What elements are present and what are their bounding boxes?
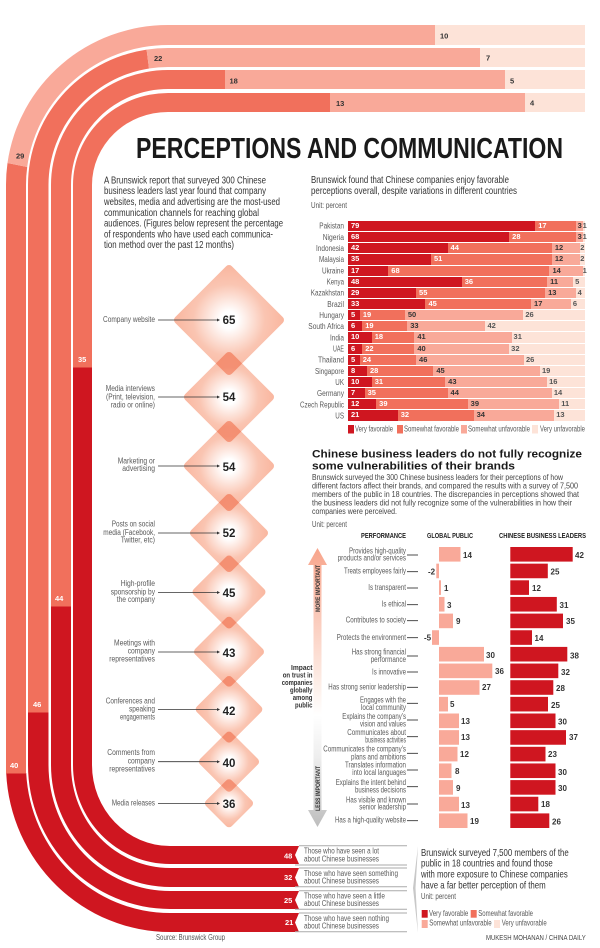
stacked bar chart: perceptions by country: 16 xyxy=(549,377,557,386)
legend: country chart: Somewhat favorable xyxy=(404,425,459,434)
stacked bar chart: perceptions by country: 31 xyxy=(514,332,522,341)
stacked bar chart: perceptions by country: 6 xyxy=(351,321,355,330)
row: seen a little: Those who have seen a little xyxy=(304,891,385,900)
heading: favorable perceptions: Unit: percent xyxy=(311,201,348,210)
stacked bar chart: perceptions by country: 46 xyxy=(419,355,427,364)
intro paragraph: channels: websites, media and advertising are the most-used xyxy=(103,196,280,208)
performance row labels xyxy=(323,546,407,825)
performance row labels: senior leadership xyxy=(359,803,406,812)
stacked bar chart: perceptions by country: 2 xyxy=(580,243,584,252)
stacked bar chart: perceptions by country: 1 xyxy=(583,232,587,241)
performance row labels: vision and values xyxy=(360,719,406,728)
performance row labels: into local languages xyxy=(352,768,406,777)
bar chart: Chinese business leaders: 30 xyxy=(558,768,567,777)
bar chart: Chinese business leaders: 30 xyxy=(558,718,567,726)
stacked bar chart: perceptions by country: 79 xyxy=(351,221,359,230)
performance row labels: Engages with the xyxy=(360,695,406,704)
column headers: PERFORMANCE xyxy=(361,531,406,540)
callout: exposure to Chinese companies xyxy=(420,847,569,901)
diamonds: communication channels xyxy=(172,263,286,829)
row: seen a little xyxy=(295,891,407,909)
channel: media interviews: radio or online) xyxy=(111,401,155,410)
legend: exposure: Somewhat unfavorable xyxy=(429,918,492,928)
channel: media interviews: 54 xyxy=(223,392,236,404)
performance row labels: Communicates about xyxy=(347,728,407,737)
stacked bar chart: perceptions by country: 12 xyxy=(555,243,563,252)
track: have seen a lot: 35 xyxy=(78,355,86,364)
row: seen a little: about Chinese businesses xyxy=(304,899,379,908)
bar chart: Chinese business leaders: 12 xyxy=(532,584,541,593)
channel: comments: representatives xyxy=(109,765,155,774)
stacked bar chart: perceptions by country: 41 xyxy=(417,332,426,341)
stacked bar chart: perceptions by country: 33 xyxy=(410,321,419,330)
arrow: importance scale xyxy=(308,548,327,827)
credit: MUKESH MOHANAN / CHINA DAILY xyxy=(486,935,586,942)
track: have seen a lot: 4 xyxy=(530,98,535,108)
heading: favorable perceptions xyxy=(311,174,517,210)
row: seen something: Those who have seen something xyxy=(304,869,398,878)
scale caption: impact on trust: companies xyxy=(282,678,312,687)
channel: media interviews xyxy=(106,384,236,410)
channel: conferences: Conferences and xyxy=(106,697,155,706)
performance row labels: Has strong senior leadership xyxy=(328,682,406,691)
stacked bar chart: perceptions by country: 24 xyxy=(363,355,371,364)
stacked bar chart: perceptions by country: 45 xyxy=(428,299,437,308)
channel: meetings: 43 xyxy=(223,648,235,660)
stacked bar chart: perceptions by country: 17 xyxy=(534,299,542,308)
row: seen nothing: about Chinese businesses xyxy=(304,921,379,930)
country labels: Singapore xyxy=(315,367,344,376)
column headers xyxy=(361,531,586,540)
country labels: Malaysia xyxy=(319,255,344,264)
legend: country chart: Very unfavorable xyxy=(540,425,585,434)
performance row labels: performance xyxy=(371,655,406,664)
bar chart: global public xyxy=(424,547,504,828)
row: seen nothing: Those who have seen nothing xyxy=(304,914,389,923)
stacked bar chart: perceptions by country: 19 xyxy=(365,321,374,330)
performance row labels: Is ethical xyxy=(382,600,406,609)
stacked bar chart: perceptions by country: 3 xyxy=(578,232,582,241)
performance row labels: Has visible and known xyxy=(346,795,406,804)
stacked bar chart: perceptions by country: 28 xyxy=(512,232,520,241)
heading: favorable perceptions: perceptions overall, despite variations in different countries xyxy=(311,185,517,197)
country labels: Czech Republic xyxy=(300,400,344,409)
performance row labels: Contributes to society xyxy=(346,615,406,624)
country labels: South Africa xyxy=(308,322,344,331)
channel: social media: 52 xyxy=(223,528,235,540)
stacked bar chart: perceptions by country: 42 xyxy=(351,243,359,252)
track: have seen something xyxy=(51,70,585,887)
stacked bar chart: perceptions by country: 43 xyxy=(448,377,457,386)
channel: comments: Comments from xyxy=(107,748,155,757)
channel: meetings: company xyxy=(128,646,155,655)
stacked bar chart: perceptions by country: 7 xyxy=(351,388,355,397)
bar chart: global public: 27 xyxy=(482,683,491,692)
track: have seen a little: 25 xyxy=(284,896,292,905)
scale caption: impact on trust: Impact xyxy=(291,663,313,672)
heading: favorable perceptions: Brunswick found that Chinese companies enjoy favorable xyxy=(311,174,509,186)
bar chart: global public: 3 xyxy=(447,601,452,610)
performance row labels: Explains the intent behind xyxy=(336,778,406,787)
stacked bar chart: perceptions by country: 21 xyxy=(351,410,359,419)
track: have seen something: 5 xyxy=(510,76,514,86)
stacked bar chart: perceptions by country: 44 xyxy=(451,243,459,252)
country labels xyxy=(300,222,345,420)
scale caption: impact on trust: globally xyxy=(290,685,313,694)
performance row labels: products and/or services xyxy=(338,554,406,563)
channel: marketing or advertising: 54 xyxy=(223,462,236,474)
row: seen a lot: Those who have seen a lot xyxy=(304,846,380,855)
stacked bar chart: perceptions by country: 32 xyxy=(511,344,520,353)
stacked bar chart: perceptions by country: 5 xyxy=(351,355,355,364)
channel: marketing or advertising xyxy=(118,456,236,474)
intro paragraph: channels: business leaders last year found that company xyxy=(104,185,267,197)
stacked bar chart: perceptions by country: 33 xyxy=(351,299,359,308)
bar chart: Chinese business leaders: 25 xyxy=(550,568,560,576)
scale caption: impact on trust xyxy=(282,663,313,709)
bar chart: Chinese business leaders: 42 xyxy=(575,551,584,560)
stacked bar chart: perceptions by country: 31 xyxy=(375,377,383,386)
channel: high-profile sponsorship: the company xyxy=(117,595,155,604)
channel: media releases xyxy=(112,798,235,811)
scale caption: impact on trust: public xyxy=(295,700,312,709)
stacked bar chart: perceptions by country: 14 xyxy=(552,266,561,275)
bar chart: Chinese business leaders: 28 xyxy=(556,684,565,693)
stacked bar chart: perceptions by country: 35 xyxy=(368,388,376,397)
stacked bar chart: perceptions by country: 5 xyxy=(351,310,355,319)
bar chart: global public: 9 xyxy=(456,617,461,626)
performance row labels: Provides high-quality xyxy=(349,546,406,555)
performance row labels: business decisions xyxy=(355,785,406,794)
stacked bar chart: perceptions by country: 13 xyxy=(556,410,565,419)
channel: meetings: representatives xyxy=(109,654,155,663)
stacked bar chart: perceptions by country: 8 xyxy=(351,366,355,375)
stacked bar chart: perceptions by country: 1 xyxy=(583,221,587,230)
channel: conferences: engagements xyxy=(120,712,155,721)
row: seen nothing xyxy=(295,913,407,932)
heading: vulnerabilities xyxy=(312,448,582,472)
row: seen a lot xyxy=(295,846,407,865)
performance row labels: Is transparent xyxy=(368,583,407,592)
stacked bar chart: perceptions by country: 19 xyxy=(363,310,371,319)
bar chart: global public: 8 xyxy=(455,767,460,776)
stacked bar chart: perceptions by country: 10 xyxy=(351,332,359,341)
stacked bar chart: perceptions by country: 14 xyxy=(554,388,562,397)
track: outermost, have seen nothing: 29 xyxy=(16,152,24,160)
stacked bar chart: perceptions by country: 32 xyxy=(401,410,409,419)
legend: country chart: Somewhat unfavorable xyxy=(468,425,530,434)
bar chart: global public: 19 xyxy=(470,817,479,826)
track: have seen something: 44 xyxy=(55,594,64,603)
arrow: importance scale: LESS IMPORTANT xyxy=(315,766,322,811)
row: seen something xyxy=(295,868,407,887)
country labels: Ukraine xyxy=(322,266,344,275)
performance row labels: local community xyxy=(361,703,406,712)
bar chart: global public: 5 xyxy=(450,700,455,709)
bar chart: Chinese business leaders: 35 xyxy=(566,617,575,626)
channel: company website: 65 xyxy=(223,315,236,327)
stacked bar chart: perceptions by country: 26 xyxy=(525,310,534,319)
stacked bar chart: perceptions by country: 6 xyxy=(351,344,355,353)
channel: marketing or advertising: advertising xyxy=(122,464,155,473)
channel: comments xyxy=(107,748,235,774)
bar chart: global public: 1 xyxy=(444,584,449,593)
stacked bar chart: perceptions by country: 51 xyxy=(434,254,442,263)
bar chart: global public: -5 xyxy=(424,634,432,642)
stacked bar chart: perceptions by country: 17 xyxy=(351,266,359,275)
channel: social media: Twitter, etc) xyxy=(121,536,155,545)
bar chart: Chinese business leaders: 18 xyxy=(541,800,550,809)
channel: media interviews: (Print, television, xyxy=(106,392,155,401)
intro paragraph: channels xyxy=(103,174,283,251)
channel: conferences xyxy=(106,697,235,721)
stacked bar chart: perceptions by country: 12 xyxy=(555,254,563,263)
legend: exposure xyxy=(422,909,547,928)
scale caption: impact on trust: on trust in xyxy=(283,670,313,679)
channel: high-profile sponsorship: High-profile xyxy=(121,579,155,588)
track: outermost, have seen nothing: 10 xyxy=(440,32,448,40)
legend: exposure: Very favorable xyxy=(429,909,469,918)
bar chart: Chinese business leaders: 31 xyxy=(560,601,569,610)
bar chart: Chinese business leaders xyxy=(510,547,584,828)
stacked bar chart: perceptions by country: 10 xyxy=(351,377,359,386)
paragraph: vulnerabilities: Unit: percent xyxy=(312,520,348,529)
bar chart: Chinese business leaders: 23 xyxy=(548,750,557,759)
bar chart: Chinese business leaders: 25 xyxy=(551,701,560,710)
stacked bar chart: perceptions by country: 6 xyxy=(573,299,577,308)
stacked bar chart: perceptions by country: 12 xyxy=(351,399,359,408)
track: have seen something: 18 xyxy=(230,76,238,86)
bracket wedge xyxy=(413,846,418,933)
country labels: Thailand xyxy=(318,356,344,365)
bar chart: Chinese business leaders: 37 xyxy=(569,733,578,742)
stacked bar chart: perceptions by country: 34 xyxy=(477,410,485,419)
channel: company website xyxy=(103,315,236,327)
stacked bar chart: perceptions by country: 26 xyxy=(526,355,534,364)
stacked bar chart: perceptions by country: 48 xyxy=(351,277,359,286)
intro paragraph: channels: tion method over the past 12 months) xyxy=(104,239,234,251)
channel: conferences: speaking xyxy=(129,705,155,714)
channel: comments: 40 xyxy=(223,758,235,770)
bar chart: global public: -2 xyxy=(428,568,436,576)
bar chart: Chinese business leaders: 14 xyxy=(534,634,544,643)
track: have seen a lot xyxy=(73,93,585,864)
bar chart: Chinese business leaders: 38 xyxy=(570,652,579,660)
paragraph: vulnerabilities: different factors affect their brands, and compared the results with a survey of 7,500 xyxy=(312,482,578,490)
intro paragraph: channels: audiences. (Figures below represent the percentage xyxy=(104,218,283,230)
bar chart: global public: 12 xyxy=(460,750,469,759)
country labels: UK xyxy=(335,378,345,387)
channel: company website: Company website xyxy=(103,315,155,324)
stacked bar chart: perceptions by country: 36 xyxy=(465,277,473,286)
bar chart: global public: 36 xyxy=(495,667,504,676)
stacked bar chart: perceptions by country: 55 xyxy=(419,288,427,297)
legend: country chart xyxy=(348,425,585,434)
callout: exposure to Chinese companies: public in 18 countries and found those xyxy=(421,858,553,870)
stacked bar chart: perceptions by country: 42 xyxy=(487,321,496,330)
track: have seen a little: 22 xyxy=(154,54,162,63)
stacked bar chart: perceptions by country: 13 xyxy=(548,288,556,297)
stacked bar chart: perceptions by country: 28 xyxy=(370,366,378,375)
channel: media releases: Media releases xyxy=(112,798,155,807)
callout: exposure to Chinese companies: have a far better perception of them xyxy=(421,879,546,891)
country labels: Kazakhstan xyxy=(311,289,344,298)
channel: meetings xyxy=(109,638,235,663)
bar chart: Chinese business leaders: 32 xyxy=(561,668,570,677)
stacked bar chart: perceptions by country: 11 xyxy=(550,277,558,286)
stacked bar chart: perceptions by country: 11 xyxy=(561,399,569,408)
performance row labels: Communicates the company's xyxy=(323,745,406,754)
channel: social media: media (Facebook, xyxy=(103,528,155,537)
stacked bar chart: perceptions by country: 44 xyxy=(451,388,459,397)
column headers: GLOBAL PUBLIC xyxy=(427,531,473,540)
bar chart: global public: 9 xyxy=(456,784,461,793)
stacked bar chart: perceptions by country: 22 xyxy=(365,344,374,353)
channel: social media: Posts on social xyxy=(112,520,155,529)
bar chart: global public: 13 xyxy=(461,733,470,742)
channel: high-profile sponsorship: sponsorship by xyxy=(111,587,155,596)
stacked bar chart: perceptions by country: 17 xyxy=(538,221,547,230)
bar chart: global public: 14 xyxy=(463,551,472,560)
channel: conferences: 42 xyxy=(223,706,235,718)
track: have seen a little: 7 xyxy=(486,54,490,62)
country labels: India xyxy=(330,333,344,342)
source: Source: Brunswick Group xyxy=(156,933,225,942)
performance row labels: Has a high-quality website xyxy=(335,816,406,825)
legend: exposure: Very unfavorable xyxy=(502,918,547,928)
channel: meetings: Meetings with xyxy=(114,638,155,647)
channel: high-profile sponsorship xyxy=(111,579,236,604)
country labels: Germany xyxy=(317,389,344,398)
intro paragraph: channels: A Brunswick report that surveyed 300 Chinese xyxy=(104,174,266,186)
bar chart: Chinese business leaders: 26 xyxy=(552,818,561,826)
country labels: UAE xyxy=(333,344,344,354)
bar chart: global public: 30 xyxy=(486,651,495,660)
country labels: Brazil xyxy=(327,300,344,309)
stacked bar chart: perceptions by country: 29 xyxy=(351,288,359,297)
legend: exposure: Somewhat favorable xyxy=(478,909,533,918)
stacked bar chart: perceptions by country: 39 xyxy=(379,399,388,408)
country labels: Hungary xyxy=(319,311,344,320)
country labels: US xyxy=(335,411,344,420)
stacked bar chart: perceptions by country: 3 xyxy=(578,221,582,230)
track: have seen something: 32 xyxy=(284,873,292,882)
stacked bar chart: perceptions by country: 35 xyxy=(351,254,359,263)
channel: media interviews: Media interviews xyxy=(106,384,155,393)
country labels: Kenya xyxy=(327,278,344,286)
stacked bar chart: perceptions by country xyxy=(348,221,587,421)
performance row labels: Explains the company's xyxy=(342,712,406,721)
performance row labels: plans and ambitions xyxy=(351,752,406,761)
channel: marketing or advertising: Marketing or xyxy=(118,456,155,465)
paragraph: vulnerabilities xyxy=(312,473,580,529)
scale caption: impact on trust: among xyxy=(293,693,313,702)
legend: country chart: Very favorable xyxy=(355,425,393,434)
performance row labels: Protects the environment xyxy=(337,633,407,642)
country labels: Indonesia xyxy=(316,244,344,253)
channel: high-profile sponsorship: 45 xyxy=(223,588,236,600)
channel: media releases: 36 xyxy=(223,799,235,811)
intro paragraph: channels: communication channels for reaching global xyxy=(104,207,259,219)
paragraph: vulnerabilities: the business leaders did not fully recognize some of the vulnerabilities in how their xyxy=(312,498,572,508)
bar chart: global public: 13 xyxy=(461,717,470,726)
stacked bar chart: perceptions by country: 50 xyxy=(408,310,416,319)
stacked bar chart: perceptions by country: 2 xyxy=(580,254,584,263)
stacked bar chart: perceptions by country: 1 xyxy=(583,266,587,275)
heading: vulnerabilities: some vulnerabilities of their brands xyxy=(312,460,515,472)
heading: vulnerabilities: Chinese business leaders do not fully recognize xyxy=(312,448,582,460)
channel: social media xyxy=(103,520,235,545)
bar chart: Chinese business leaders: 30 xyxy=(558,784,567,793)
row: seen something: about Chinese businesses xyxy=(304,876,379,885)
stacked bar chart: perceptions by country: 40 xyxy=(417,344,426,353)
stacked bar chart: perceptions by country: 5 xyxy=(575,277,579,286)
paragraph: vulnerabilities: companies were perceived. xyxy=(312,507,397,516)
performance row labels: Has strong financial xyxy=(352,647,406,656)
stacked bar chart: perceptions by country: 18 xyxy=(375,332,383,341)
performance row labels: Is innovative xyxy=(372,667,406,676)
paragraph: vulnerabilities: Brunswick surveyed the 300 Chinese business leaders for their perceptions of how xyxy=(312,473,563,482)
track: outermost, have seen nothing: 21 xyxy=(285,918,293,927)
performance row labels: business activities xyxy=(365,735,406,744)
intro paragraph: channels: of respondents who have used each communica- xyxy=(104,228,273,240)
performance row labels: Treats employees fairly xyxy=(344,566,406,575)
stacked bar chart: perceptions by country: 45 xyxy=(436,366,445,375)
track: have seen a lot: 48 xyxy=(284,852,292,860)
arrow: importance scale: MORE IMPORTANT xyxy=(315,565,322,612)
channel: comments: company xyxy=(128,756,155,765)
stacked bar chart: perceptions by country: 19 xyxy=(542,366,550,375)
track: have seen a lot: 13 xyxy=(336,99,344,108)
country labels: Nigeria xyxy=(323,233,344,242)
stacked bar chart: perceptions by country: 4 xyxy=(578,288,582,297)
track: outermost, have seen nothing: 40 xyxy=(10,761,18,770)
performance row labels: Translates information xyxy=(345,761,406,770)
stacked bar chart: perceptions by country: 68 xyxy=(351,232,359,241)
row tick marks xyxy=(407,555,418,821)
stacked bar chart: perceptions by country: 68 xyxy=(391,266,400,275)
bar chart: global public: 13 xyxy=(461,801,470,810)
track: have seen a little: 46 xyxy=(33,700,41,709)
stacked bar chart: perceptions by country: 39 xyxy=(471,399,479,408)
country labels: Pakistan xyxy=(319,222,344,231)
callout: exposure to Chinese companies: Unit: percent xyxy=(421,892,457,901)
row: seen a lot: about Chinese businesses xyxy=(304,855,379,864)
